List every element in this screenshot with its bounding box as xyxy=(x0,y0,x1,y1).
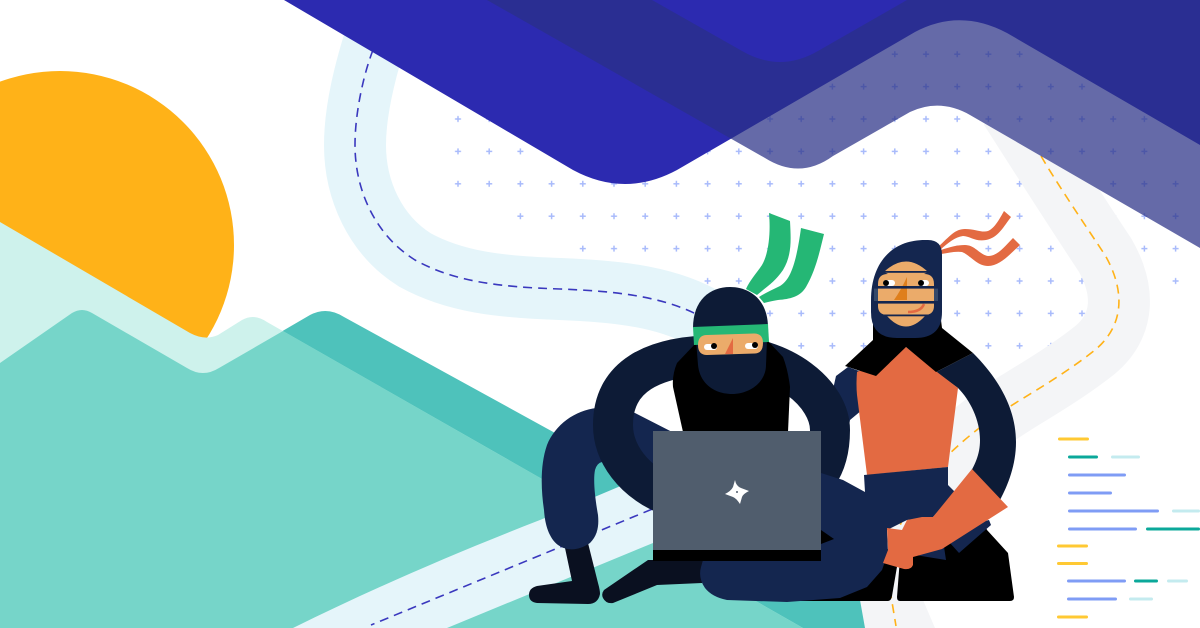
right ninja nose xyxy=(894,277,907,300)
left ninja green ribbons xyxy=(746,213,824,303)
blue dashed route xyxy=(355,50,746,625)
icon: shuriken logo xyxy=(725,480,749,504)
left ninja hood dome xyxy=(693,287,768,328)
top blue mountain xyxy=(284,0,1200,184)
orange sleeve and glove xyxy=(883,469,1008,569)
yellow dashed route xyxy=(890,156,1119,626)
left ninja eyes xyxy=(704,342,758,350)
left ninja nose xyxy=(725,338,733,354)
laptop wedge xyxy=(821,530,834,544)
winding light-blue road xyxy=(293,30,746,628)
right ninja black collar xyxy=(845,320,973,376)
right ninja eyes xyxy=(883,280,929,286)
laptop xyxy=(653,431,834,561)
right ninja orange tunic xyxy=(856,347,958,475)
right ninja hood xyxy=(871,240,942,338)
left ninja headband xyxy=(693,324,769,345)
left ninja arms ring xyxy=(613,355,830,497)
right ninja back arm xyxy=(815,367,862,470)
top translucent slate mountain xyxy=(487,0,1200,248)
right ninja sleeve details xyxy=(915,520,991,560)
winding grey road xyxy=(858,108,1119,628)
left ninja face xyxy=(698,334,763,355)
front mountain: pale mint xyxy=(0,222,803,628)
left ninja xyxy=(529,213,1008,604)
left ninja black torso xyxy=(673,340,790,432)
foreground navy leg xyxy=(700,467,955,602)
plus-sign dot grid xyxy=(443,46,1190,354)
left ninja bent leg xyxy=(542,408,690,549)
mountain overlap: mid teal xyxy=(0,310,803,628)
laptop lid xyxy=(653,431,821,550)
right ninja mask bars xyxy=(874,271,938,316)
right ninja headband ribbons xyxy=(938,211,1020,266)
laptop base xyxy=(653,550,821,561)
sun xyxy=(0,71,234,419)
right ninja trousers xyxy=(780,525,1014,601)
left ninja front foot xyxy=(602,560,707,603)
back mountain: dark teal xyxy=(0,310,910,628)
left ninja lower mask xyxy=(696,340,767,394)
code lines xyxy=(1058,439,1198,617)
left ninja rear foot xyxy=(529,543,600,604)
right ninja far arm xyxy=(936,353,1016,500)
right ninja xyxy=(780,211,1020,601)
right ninja face behind cage xyxy=(874,262,938,326)
right ninja smile xyxy=(908,304,924,312)
